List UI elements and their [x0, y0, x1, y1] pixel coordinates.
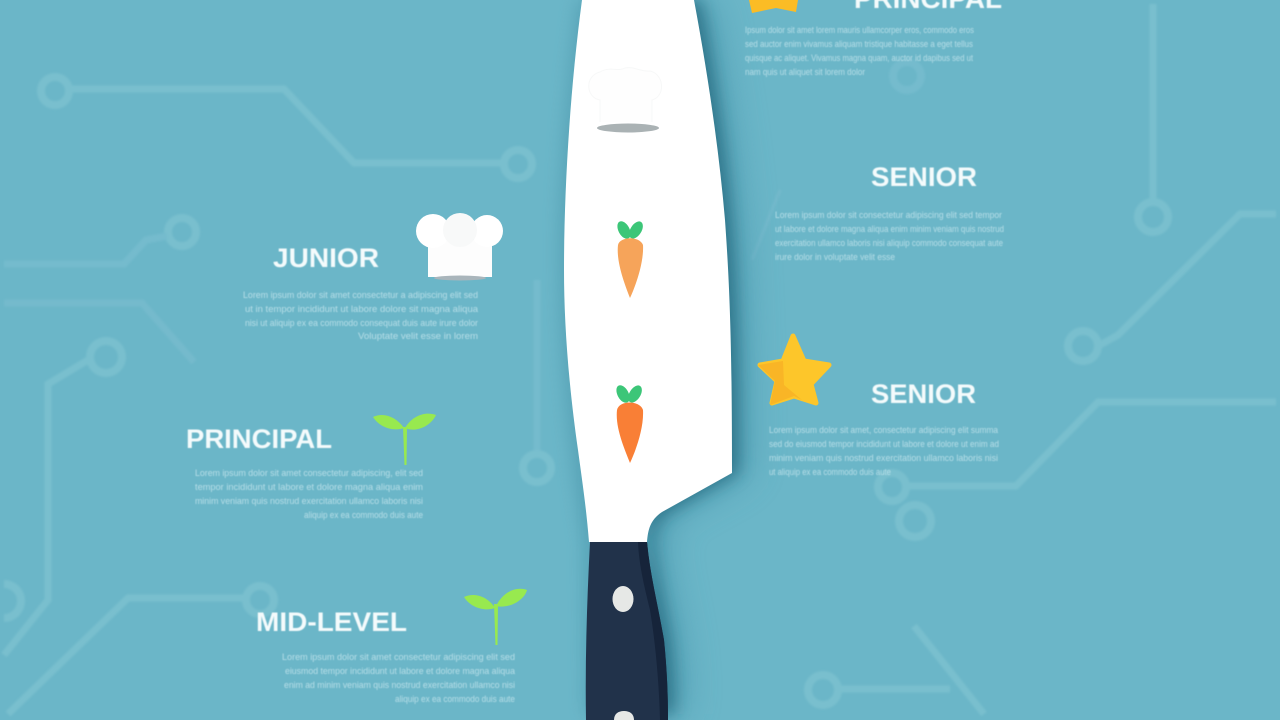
text block: principal left: tempor incididunt ut labore et dolore magna aliqua enim	[195, 482, 423, 493]
handle edge	[638, 542, 668, 720]
text block: principal left	[195, 468, 423, 521]
text block: senior lower: ut aliquip ex ea commodo duis aute	[769, 467, 891, 478]
knife	[564, 0, 732, 720]
text block: junior: Voluptate velit esse in lorem	[358, 331, 478, 342]
heading: junior: JUNIOR	[273, 243, 379, 273]
text block: senior lower: minim veniam quis nostrud exercitation ullamco laboris nisi	[769, 453, 998, 464]
text block: junior: ut in tempor incididunt ut labore dolore sit magna aliqua	[245, 304, 479, 315]
knife edge shadow	[647, 0, 739, 714]
icon: sprout lower	[464, 589, 527, 645]
text block: senior lower	[769, 425, 999, 478]
icon: faint chef hat on blade	[589, 68, 662, 132]
text block: senior upper	[775, 210, 1004, 263]
knife wide soft shadow	[616, 0, 748, 714]
text block: principal top right	[745, 25, 974, 78]
text block: principal top right: nam quis ut aliquet sit lorem dolor	[745, 67, 865, 78]
text block: senior upper: ut labore et dolore magna aliqua enim minim veniam quis nostrud	[775, 224, 1004, 235]
text block: mid-level: enim ad minim veniam quis nostrud exercitation ullamco nisi	[284, 680, 515, 691]
text block: junior	[243, 290, 479, 342]
icon: chef hat	[416, 213, 503, 280]
text block: principal left: minim veniam quis nostrud exercitation ullamco laboris nisi	[195, 496, 423, 507]
text block: principal left: aliquip ex ea commodo duis aute	[304, 510, 423, 521]
text block: principal top right: sed auctor enim vivamus aliquam tristique habitasse a eget tellus	[745, 39, 973, 50]
rivet bottom	[614, 711, 634, 720]
text block: senior lower: Lorem ipsum dolor sit amet, consectetur adipiscing elit summa	[769, 425, 999, 436]
text block: mid-level: Lorem ipsum dolor sit amet consectetur adipiscing elit sed	[282, 652, 515, 663]
icon: carrot on blade light	[615, 219, 646, 298]
heading: principal left: PRINCIPAL	[186, 424, 332, 454]
text block: mid-level: aliquip ex ea commodo duis aute	[395, 694, 515, 705]
text block: senior upper: irure dolor in voluptate velit esse	[775, 252, 895, 263]
handle	[586, 542, 668, 720]
text block: mid-level	[282, 652, 516, 705]
icon: sprout upper	[373, 414, 436, 465]
heading: senior upper: SENIOR	[871, 162, 977, 192]
heading: senior lower: SENIOR	[871, 379, 976, 409]
text block: principal left: Lorem ipsum dolor sit amet consectetur adipiscing, elit sed	[195, 468, 423, 479]
text block: senior lower: sed do eiusmod tempor incididunt ut labore et dolore ut enim ad	[769, 439, 999, 450]
icon: star cropped top	[749, 0, 798, 13]
text block: senior upper: exercitation ullamco laboris nisi aliquip commodo consequat aute	[775, 238, 1003, 249]
text block: principal top right: quisque ac aliquet. Vivamus magna quam, auctor id dapibus sed ut	[745, 53, 973, 64]
text block: junior: nisi ut aliquip ex ea commodo consequat duis aute irure dolor	[245, 318, 478, 329]
text block: principal top right: Ipsum dolor sit amet lorem mauris ullamcorper eros, commodo eros	[745, 25, 974, 36]
text block: senior upper: Lorem ipsum dolor sit consectetur adipiscing elit sed tempor	[775, 210, 1002, 221]
heading: mid-level: MID-LEVEL	[256, 607, 407, 637]
text block: mid-level: eiusmod tempor incididunt ut labore et dolore magna aliqua	[285, 666, 516, 677]
blade	[564, 0, 732, 542]
icon: carrot on blade saturated	[614, 383, 645, 463]
text block: junior: Lorem ipsum dolor sit amet consectetur a adipiscing elit sed	[243, 290, 478, 301]
blade shadow left	[559, 0, 605, 714]
icon: star	[758, 336, 829, 405]
rivet top	[612, 586, 634, 612]
